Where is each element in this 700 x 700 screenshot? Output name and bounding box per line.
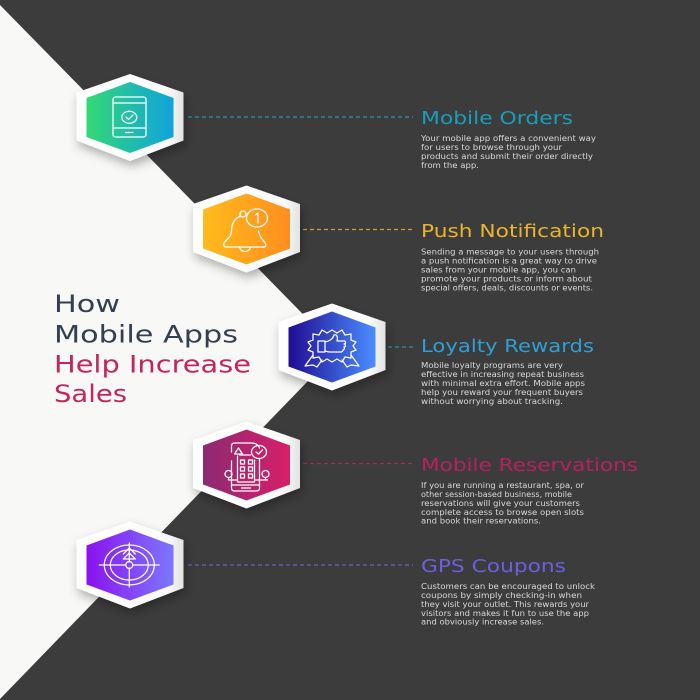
hexagon: push notification <box>193 186 300 272</box>
body: gps coupons: Customers can be encouraged to unlock <box>421 582 596 591</box>
body: mobile orders: from the app. <box>421 161 479 170</box>
body: mobile orders: Your mobile app offers a convenient way <box>420 134 596 143</box>
body: push notification: special offers, deals, discounts or events. <box>421 284 593 292</box>
text block: mobile reservations <box>421 456 638 526</box>
main title: Help Increase <box>54 350 251 378</box>
body: loyalty rewards: help you reward your frequent buyers <box>421 388 583 397</box>
body: loyalty rewards: Mobile loyalty programs are very <box>421 361 563 370</box>
hexagon: mobile orders <box>76 74 184 161</box>
connector: mobile orders <box>188 116 413 118</box>
body: loyalty rewards: with minimal extra effort. Mobile apps <box>421 379 585 388</box>
text block: push notification <box>421 222 604 292</box>
main title: How <box>54 290 120 318</box>
icon: phone with building <box>225 443 269 491</box>
hexagon: mobile reservations <box>193 422 300 508</box>
main title: Mobile Apps <box>54 320 238 348</box>
body: gps coupons <box>421 582 596 626</box>
connector: push notification <box>303 228 413 230</box>
text block: mobile orders <box>420 109 596 170</box>
main title <box>54 290 251 408</box>
hexagon: loyalty rewards <box>278 304 386 390</box>
heading: mobile orders: Mobile Orders <box>421 109 573 129</box>
body: push notification: Sending a message to your users through <box>421 248 599 256</box>
body: mobile reservations: reservations will give your customers <box>421 499 580 508</box>
body: mobile reservations <box>421 481 585 526</box>
heading: loyalty rewards: Loyalty Rewards <box>421 337 594 357</box>
body: loyalty rewards: without worrying about tracking. <box>421 397 563 406</box>
body: push notification <box>421 248 599 292</box>
main title: Sales <box>54 380 127 408</box>
heading: push notification: Push Notification <box>421 222 604 242</box>
body: mobile reservations: and book their reservations. <box>421 516 541 526</box>
icon: phone with check <box>113 97 146 137</box>
body: loyalty rewards: effective in increasing repeat business <box>421 370 584 379</box>
heading: mobile reservations: Mobile Reservations <box>421 456 638 476</box>
body: push notification: a push notification is a great way to drive <box>421 256 597 266</box>
hexagon: gps coupons <box>76 522 184 608</box>
heading: gps coupons: GPS Coupons <box>421 557 566 577</box>
icon: thumbs-up badge <box>305 330 359 367</box>
body: mobile reservations: complete access to browse open slots <box>421 508 584 517</box>
icon: bell with badge <box>224 209 268 252</box>
body: push notification: promote your products or inform about <box>421 274 592 284</box>
body: mobile orders <box>420 134 596 170</box>
body: mobile reservations: If you are running a restaurant, spa, or <box>421 481 585 490</box>
body: gps coupons: coupons by simply checking-in when <box>421 591 582 600</box>
body: loyalty rewards <box>421 361 585 406</box>
body: mobile reservations: other session-based business, mobile <box>421 490 572 499</box>
body: mobile orders: products and submit their order directly <box>421 152 593 161</box>
body: push notification: sales from your mobile app, you can <box>421 266 576 274</box>
text block: loyalty rewards <box>421 337 594 406</box>
text block: gps coupons <box>421 557 596 626</box>
body: mobile orders: for users to browse through your <box>421 143 563 152</box>
body: gps coupons: visitors and makes it fun to use the app <box>421 609 589 618</box>
icon: gps target <box>99 543 159 587</box>
body: gps coupons: they visit your outlet. This rewards your <box>421 600 590 609</box>
connector: gps coupons <box>188 564 413 566</box>
background: light triangle <box>0 5 338 699</box>
connector: mobile reservations <box>303 462 413 464</box>
body: gps coupons: and obviously increase sales. <box>421 618 544 626</box>
connector: loyalty rewards <box>388 346 413 348</box>
